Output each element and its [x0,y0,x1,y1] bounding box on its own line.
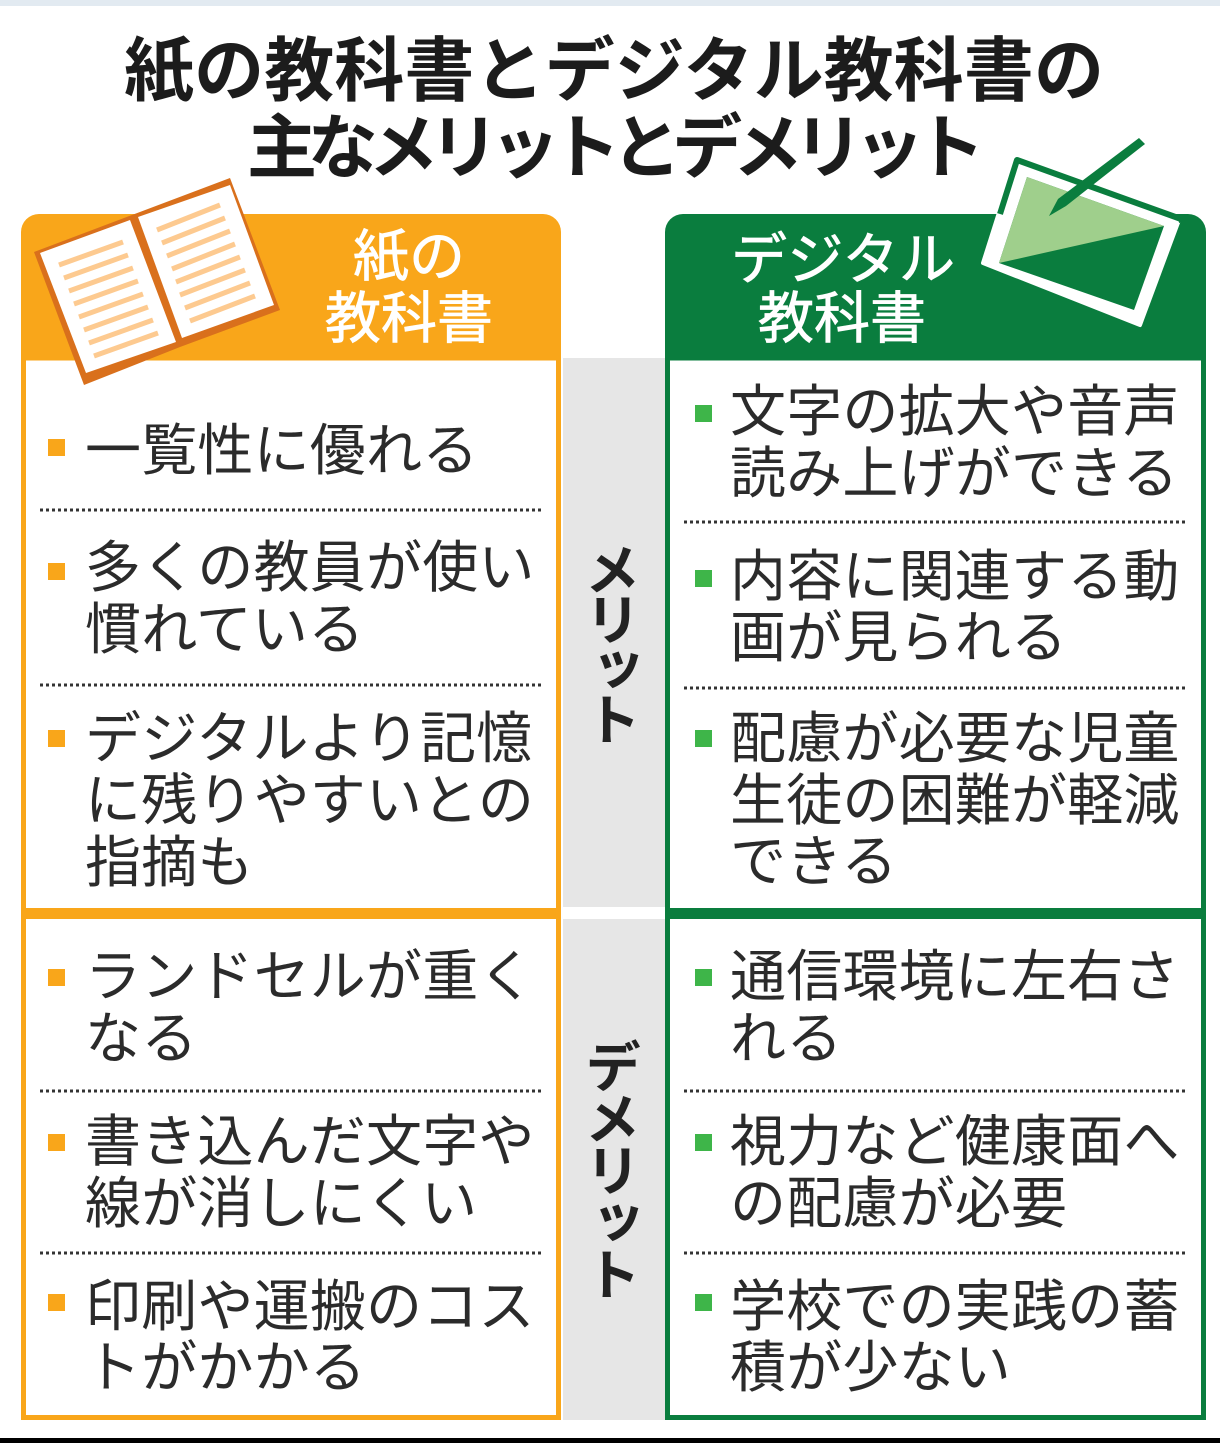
demerit item: 書き込んだ文字や [85,1110,535,1173]
heading: paper textbook: 紙の [353,225,465,288]
demerit item [695,1110,1180,1235]
heading: digital textbook: 教科書 [758,287,926,350]
merit item: に残りやすいとの [85,769,534,832]
demerit item: 線が消しにくい [85,1172,477,1235]
merit item [695,707,1180,893]
merit item: デジタルより記憶 [85,707,532,770]
demerit item: 視力など健康面へ [730,1110,1180,1173]
merit item: 慣れている [85,598,364,661]
demerit item [48,1110,535,1235]
merit item: できる [730,830,897,893]
heading: paper textbook: 教科書 [325,287,493,350]
merit item: 多くの教員が使い [85,536,535,599]
label: merit: メリット [578,541,640,747]
demerit item [48,1275,535,1399]
icon: tablet with stylus [983,138,1182,325]
title [124,32,1104,187]
demerit item: 印刷や運搬のコス [85,1275,535,1338]
center column: merit and demerit labels [563,358,665,1420]
demerit item: ランドセルが重く [85,945,535,1008]
demerit item [695,945,1180,1070]
merit item: 指摘も [85,831,254,894]
demerit item: れる [730,1007,842,1070]
demerit item: の配慮が必要 [730,1172,1067,1235]
merit item: 配慮が必要な児童 [730,707,1180,770]
merit item [695,380,1180,505]
title: 主なメリットとデメリット [247,109,985,187]
merit item: 内容に関連する動 [730,545,1180,608]
merit item: 画が見られる [730,606,1067,669]
panel: digital textbook [665,214,1206,1418]
panel: paper textbook [21,214,561,1418]
demerit item: なる [85,1007,197,1070]
demerit item: 学校での実践の蓄 [730,1275,1180,1338]
demerit item: 積が少ない [730,1336,1011,1399]
label: demerit: デメリット [578,1038,640,1302]
demerit item: トがかかる [85,1336,366,1399]
demerit item [695,1275,1180,1399]
merit item: 一覧性に優れる [85,419,478,482]
icon: stylus [1049,138,1145,216]
merit item [695,545,1180,669]
heading: digital textbook [731,228,955,350]
demerit item [48,945,535,1070]
icon: open book [34,178,280,385]
title: 紙の教科書とデジタル教科書の [124,32,1104,110]
heading: digital textbook: デジタル [731,228,955,291]
demerit item: 通信環境に左右さ [730,945,1180,1008]
merit item: 生徒の困難が軽減 [730,769,1180,832]
merit item [48,536,535,661]
merit item [48,707,534,894]
merit item: 読み上げができる [730,442,1178,505]
heading: paper textbook [325,225,493,350]
merit item: 文字の拡大や音声 [730,380,1180,443]
